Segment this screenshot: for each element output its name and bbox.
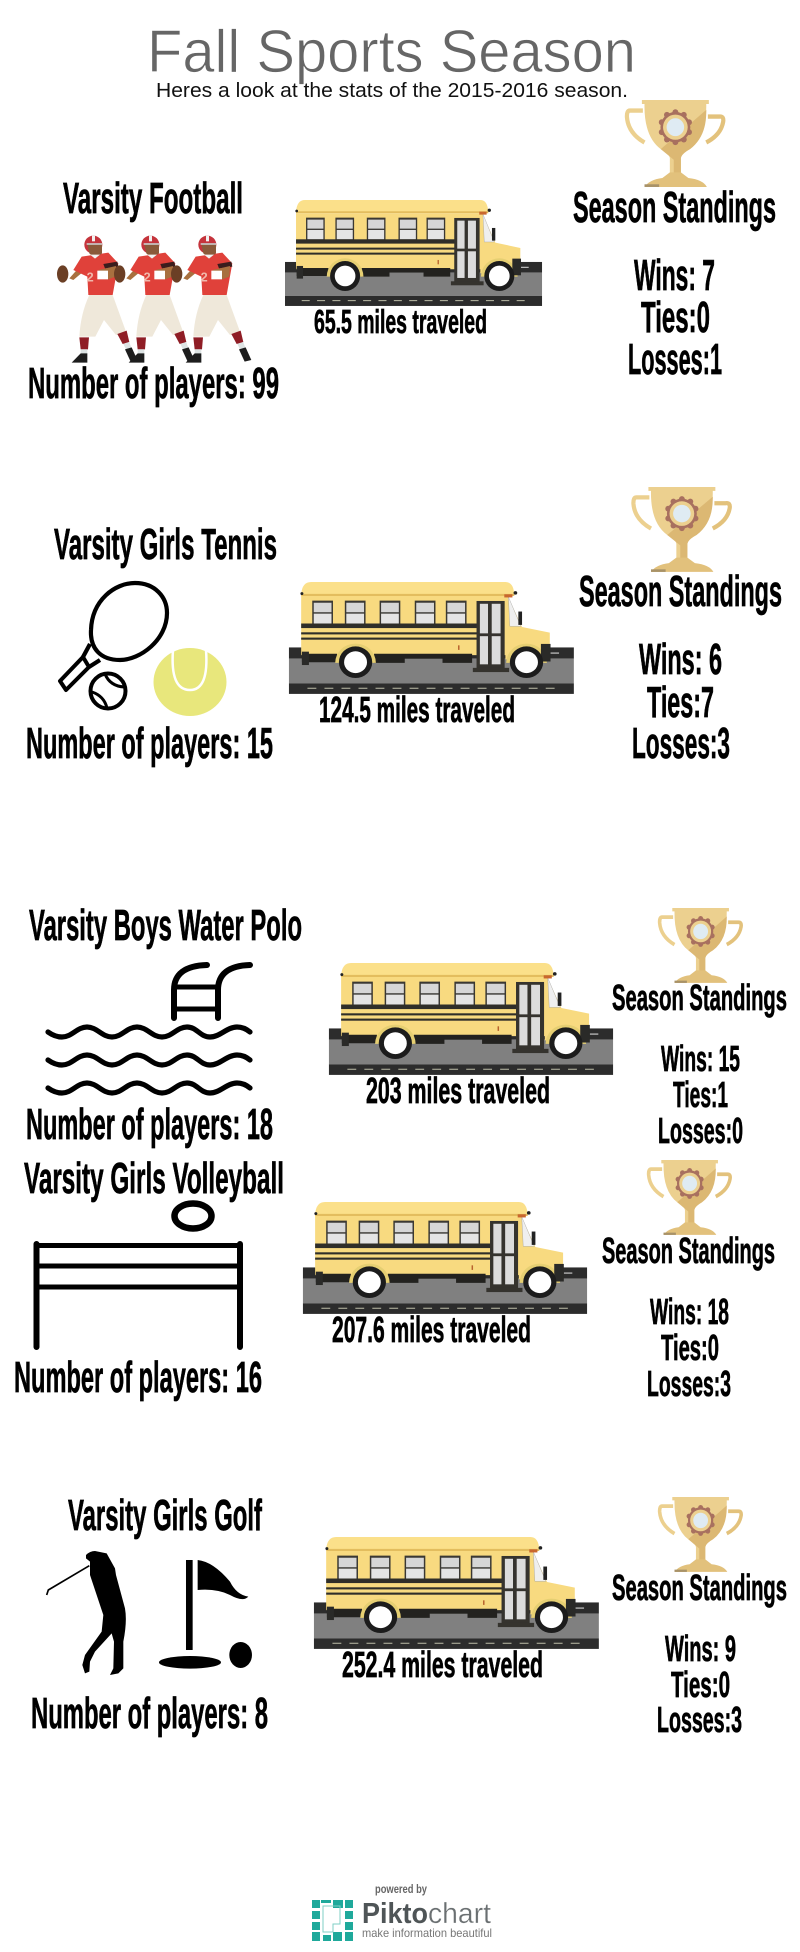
player count: Number of players: 16 [14, 1353, 262, 1402]
season record [647, 1291, 731, 1404]
icon: school bus [289, 582, 574, 694]
footer: piktochart logo [312, 1882, 492, 1941]
panel: varsity boys water polo [26, 901, 787, 1151]
season record: Wins: 9 [665, 1628, 736, 1669]
miles traveled: 203 miles traveled [366, 1070, 550, 1111]
icon: golfer, flag and ball [47, 1551, 252, 1675]
icon: trophy [627, 100, 723, 187]
player count: Number of players: 8 [31, 1689, 268, 1738]
tagline: make information beautiful [362, 1926, 492, 1940]
icon: trophy [660, 1497, 741, 1572]
player count: Number of players: 18 [26, 1100, 273, 1149]
miles traveled: 207.6 miles traveled [332, 1309, 531, 1350]
season record: Ties:1 [673, 1074, 728, 1115]
season record: Wins: 18 [650, 1291, 729, 1332]
icon: trophy [633, 487, 730, 572]
icon: piktochart mark [312, 1900, 353, 1941]
miles traveled: 124.5 miles traveled [319, 689, 515, 730]
season record: Losses:3 [647, 1363, 731, 1404]
icon: school bus [329, 963, 613, 1075]
season record [632, 635, 730, 768]
season record [657, 1628, 742, 1740]
miles traveled: 252.4 miles traveled [342, 1644, 543, 1685]
icon: tennis racket and balls [60, 583, 226, 716]
title: Fall Sports Season [147, 18, 636, 85]
wordmark: chart [428, 1898, 491, 1930]
season record: Ties:0 [661, 1327, 719, 1368]
heading: varsity girls tennis: Varsity Girls Tennis [54, 520, 277, 569]
icon: pool ladder and waves [48, 965, 250, 1093]
panel: varsity football [28, 100, 776, 408]
player count: Number of players: 15 [26, 719, 273, 768]
heading: varsity girls golf: Varsity Girls Golf [68, 1491, 262, 1540]
subtitle: Heres a look at the stats of the 2015-2016 season. [156, 79, 628, 102]
icon: trophy [649, 1160, 730, 1235]
powered by text: powered by [375, 1882, 427, 1896]
season record: Wins: 7 [634, 251, 715, 300]
wordmark: Pikto [362, 1898, 428, 1930]
icon: three football players [57, 236, 251, 363]
season record [658, 1038, 743, 1151]
panel: varsity girls tennis [26, 487, 782, 768]
season record [628, 251, 722, 384]
icon: volleyball net and ball [36, 1204, 240, 1347]
season record: Wins: 6 [639, 635, 722, 684]
heading: varsity boys water polo: Varsity Boys Water Polo [29, 901, 302, 950]
season record: Ties:7 [647, 678, 714, 727]
miles traveled: 65.5 miles traveled [314, 303, 487, 340]
icon: school bus [303, 1202, 587, 1314]
icon: school bus [285, 200, 542, 306]
player count: Number of players: 99 [28, 359, 279, 408]
icon: trophy [660, 908, 741, 983]
panel: varsity girls golf [31, 1491, 787, 1740]
season record: Ties:0 [641, 293, 710, 342]
heading: varsity girls volleyball: Varsity Girls Volleyball [24, 1154, 284, 1203]
icon: school bus [314, 1537, 599, 1649]
panel: varsity girls volleyball [14, 1154, 775, 1404]
heading: varsity football: Varsity Football [63, 174, 243, 223]
season record: Ties:0 [671, 1664, 730, 1705]
